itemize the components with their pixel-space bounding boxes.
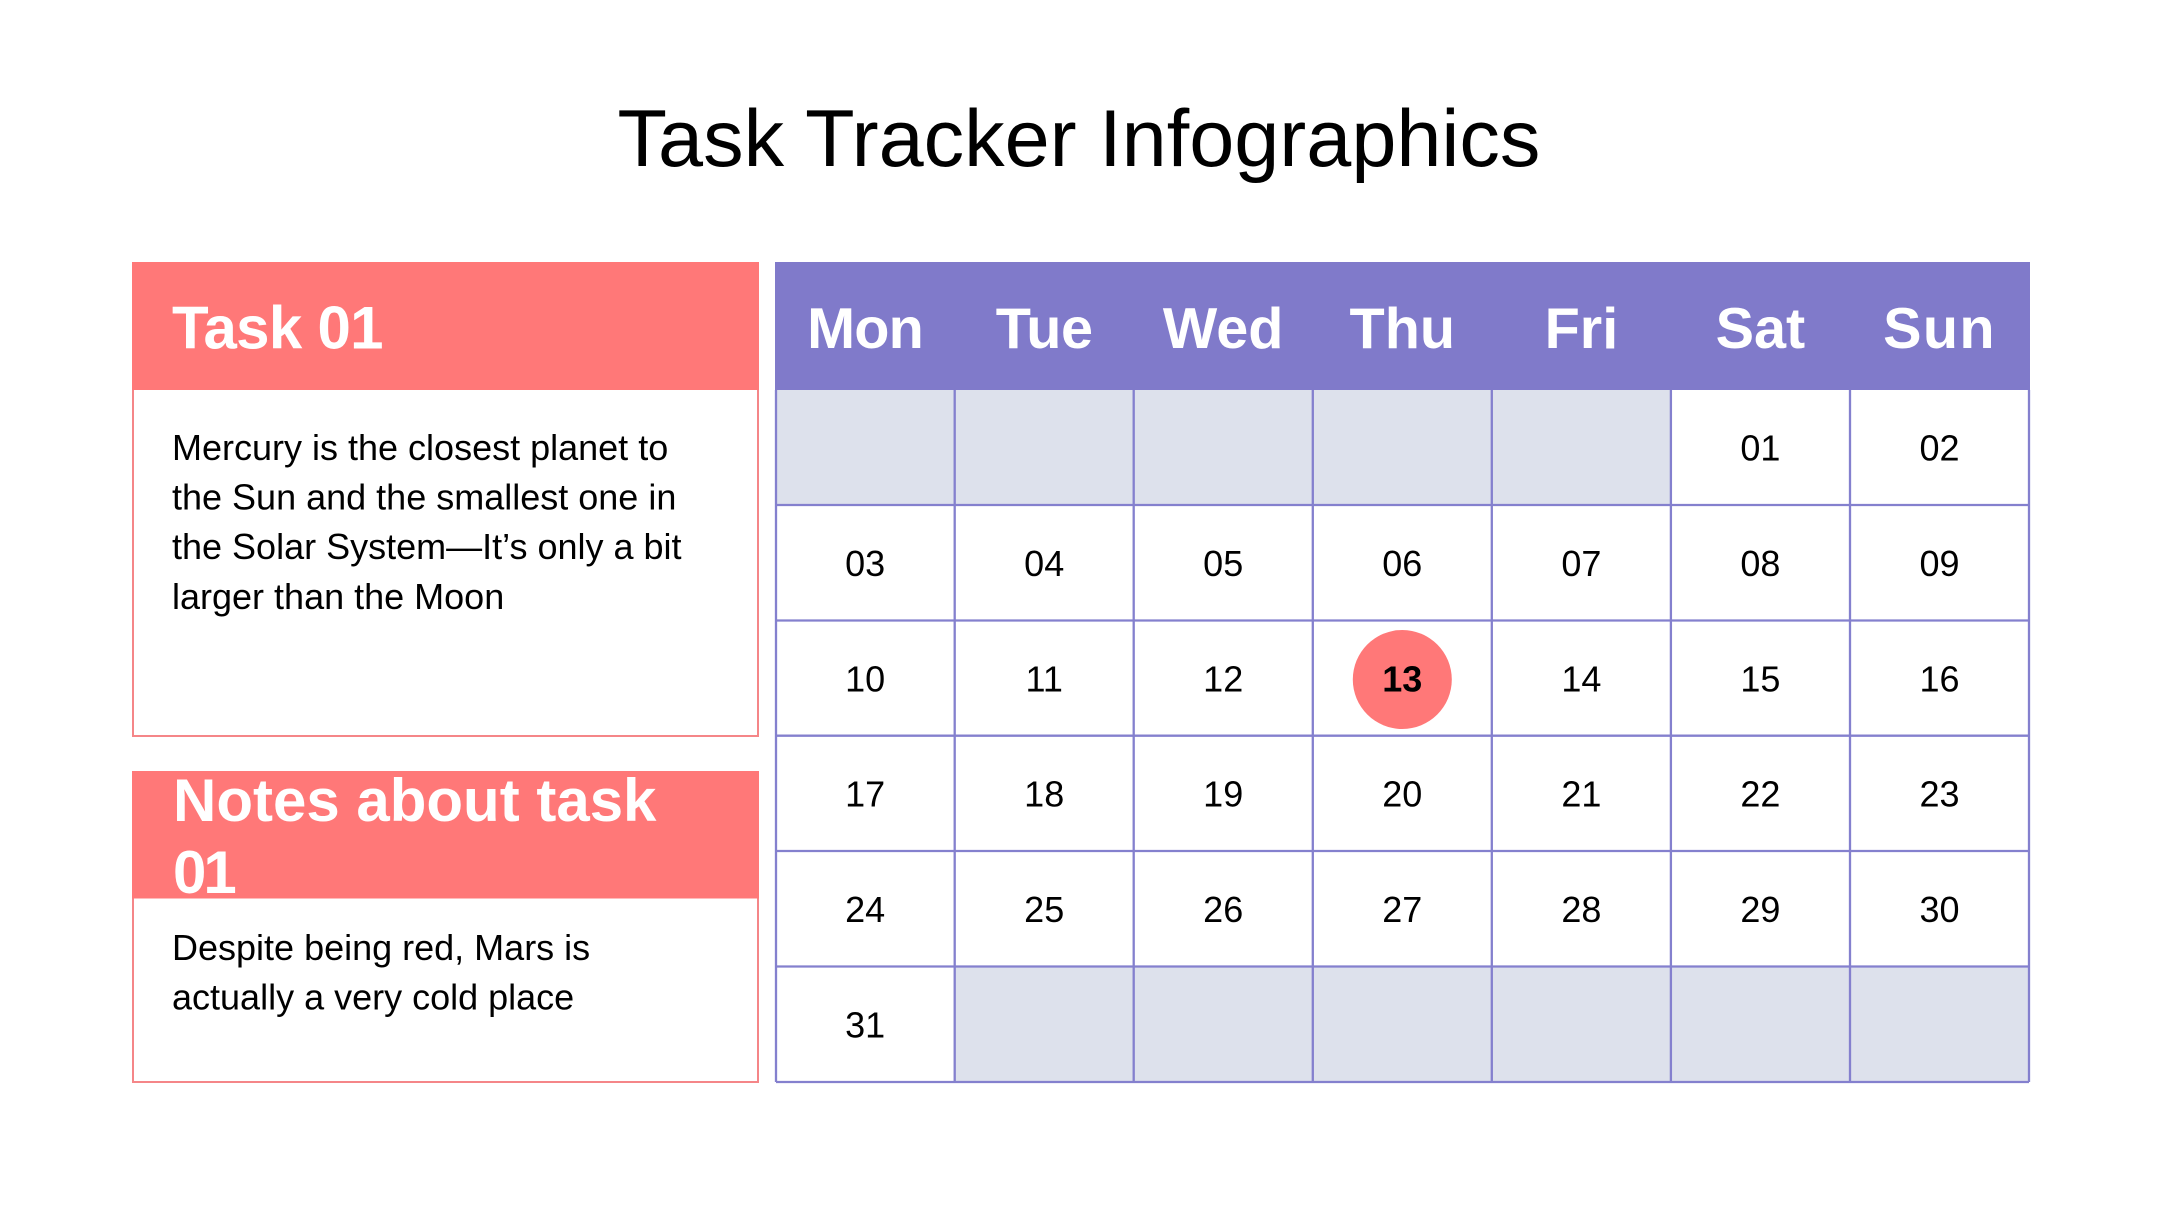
weekday header bar: Mon <box>807 297 923 361</box>
day numbers: 16 <box>1919 658 1960 699</box>
day numbers: 05 <box>1203 543 1243 584</box>
highlight circle: day 13 <box>1353 630 1452 729</box>
task 01 header bar <box>132 262 759 390</box>
day numbers: 25 <box>1024 889 1064 930</box>
day numbers: 29 <box>1740 889 1780 930</box>
day numbers: 30 <box>1919 889 1960 930</box>
notes header bar <box>132 771 759 898</box>
day numbers: 21 <box>1561 774 1601 815</box>
day numbers: 18 <box>1024 774 1064 815</box>
weekday header bar: Wed <box>1163 297 1283 361</box>
day numbers: 19 <box>1203 774 1243 815</box>
notes description: Despite being red, Mars is <box>172 927 590 968</box>
task 01 description <box>172 427 682 617</box>
task 01 description: the Sun and the smallest one in <box>172 477 676 518</box>
weekday header bar: Tue <box>996 297 1093 361</box>
panel: task 01 <box>132 262 759 736</box>
day numbers: 10 <box>845 658 885 699</box>
day numbers: 24 <box>845 889 885 930</box>
day numbers: 22 <box>1740 774 1780 815</box>
weekday header bar: Thu <box>1350 297 1455 361</box>
task 01 description: larger than the Moon <box>172 576 504 617</box>
notes heading: 01 <box>173 839 235 906</box>
weekday header bar <box>775 262 2030 390</box>
day numbers: 02 <box>1919 428 1960 469</box>
day numbers: 13 <box>1382 658 1422 699</box>
notes description: actually a very cold place <box>172 977 574 1018</box>
task 01 description: the Solar System—It’s only a bit <box>172 526 682 567</box>
day numbers: 20 <box>1382 774 1422 815</box>
panel: notes about task 01 <box>132 767 759 1082</box>
title: Task Tracker Infographics <box>618 94 1540 184</box>
notes heading <box>173 767 657 906</box>
day numbers <box>845 428 1960 1045</box>
weekday header bar: Fri <box>1545 297 1618 361</box>
day numbers: 15 <box>1740 658 1780 699</box>
notes description <box>172 927 590 1018</box>
day numbers: 31 <box>845 1004 885 1045</box>
day numbers: 06 <box>1382 543 1422 584</box>
task 01 heading: Task 01 <box>172 294 383 362</box>
weekday header bar: Sun <box>1883 297 1996 361</box>
day numbers: 12 <box>1203 658 1243 699</box>
day numbers: 11 <box>1026 658 1063 699</box>
day numbers: 07 <box>1561 543 1601 584</box>
day numbers: 17 <box>845 774 885 815</box>
calendar background <box>776 263 2029 1082</box>
day numbers: 23 <box>1919 774 1960 815</box>
day numbers: 01 <box>1740 428 1780 469</box>
day numbers: 28 <box>1561 889 1601 930</box>
empty cells <box>776 390 2029 1082</box>
day numbers: 08 <box>1740 543 1780 584</box>
weekday header bar: Sat <box>1716 297 1805 361</box>
notes heading: Notes about task <box>173 767 657 834</box>
day numbers: 14 <box>1561 658 1601 699</box>
day numbers: 09 <box>1919 543 1960 584</box>
task 01 description: Mercury is the closest planet to <box>172 427 668 468</box>
day numbers: 03 <box>845 543 885 584</box>
day numbers: 04 <box>1024 543 1064 584</box>
day numbers: 26 <box>1203 889 1243 930</box>
calendar <box>775 262 2030 1082</box>
day numbers: 27 <box>1382 889 1422 930</box>
